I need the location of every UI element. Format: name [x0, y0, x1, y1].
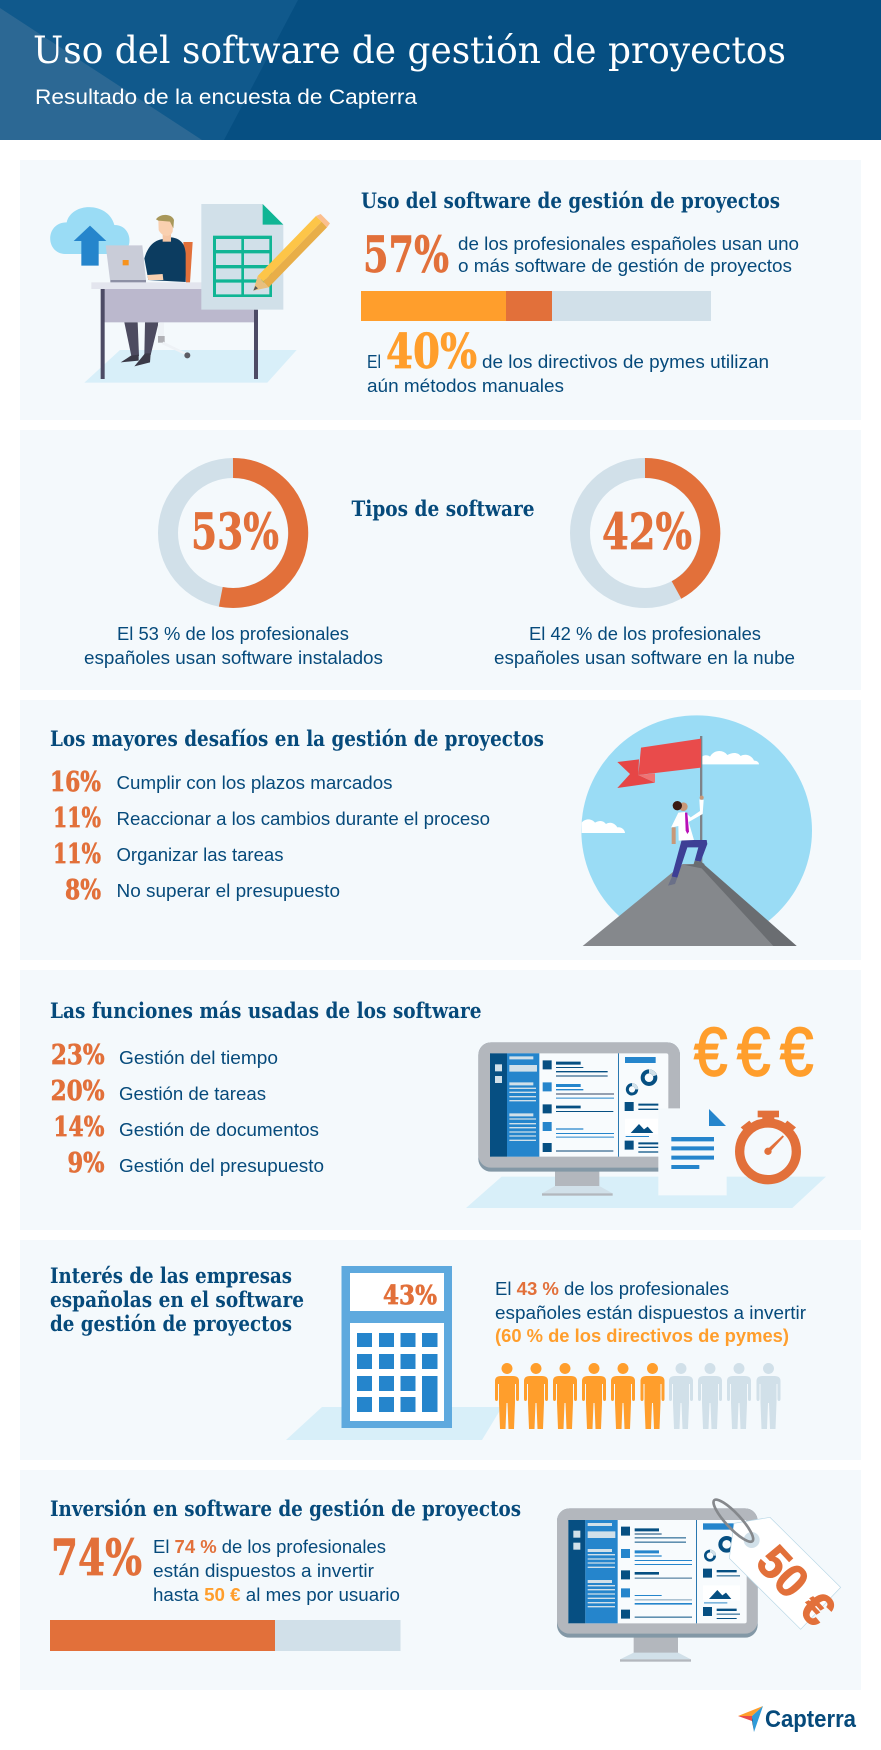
list of features: 23% [51, 1040, 105, 1071]
heading: Uso del software de gestión de proyectos [361, 188, 780, 213]
illustration: monitor, euros, document, stopwatch: € [780, 1015, 813, 1091]
illustration: monitor with 50 € price tag: 50 € [747, 1535, 845, 1635]
text: investment description: hasta 50 € al mes por usuario [153, 1584, 400, 1605]
heading: Los mayores desafíos en la gestión de proyectos [50, 726, 544, 751]
text: interest description: españoles están dispuestos a invertir [495, 1302, 806, 1323]
panel: interest [20, 1240, 861, 1460]
subtitle: Resultado de la encuesta de Capterra [35, 86, 417, 109]
list of features: 14% [53, 1112, 104, 1143]
list of features [51, 1040, 324, 1179]
donut 53% [168, 468, 298, 598]
stat 40%: 40% [386, 324, 477, 380]
text: investment description: El 74 % de los profesionales [153, 1536, 386, 1557]
list of features: Gestión de documentos [119, 1119, 319, 1140]
stacked bar [361, 291, 711, 321]
text: 57% description: de los profesionales españoles usan uno [458, 233, 799, 254]
illustration: climber with flag on mountain [581, 715, 812, 946]
donut 53%: 53% [191, 502, 279, 561]
list of challenges: 11% [53, 839, 101, 870]
stat 74%: 74% [51, 1528, 142, 1587]
caption right [494, 623, 795, 668]
heading: Tipos de software [352, 496, 534, 521]
text: 57% description [458, 233, 799, 276]
list of features: Gestión del presupuesto [119, 1155, 324, 1176]
list of challenges: 8% [65, 875, 101, 906]
text: investment description [153, 1536, 400, 1605]
caption right: españoles usan software en la nube [494, 647, 795, 668]
illustration: calculator 43% [342, 1266, 452, 1428]
heading: Las funciones más usadas de los software [50, 998, 482, 1023]
list of challenges: Cumplir con los plazos marcados [116, 772, 392, 793]
heading [50, 1263, 304, 1336]
caption left: El 53 % de los profesionales [117, 623, 349, 644]
heading: españolas en el software [50, 1287, 304, 1312]
header banner [0, 0, 881, 140]
list of challenges: 16% [50, 767, 101, 798]
list of features: Gestión de tareas [119, 1083, 266, 1104]
heading: de gestión de proyectos [50, 1311, 292, 1336]
stat 40%: de los directivos de pymes utilizan [482, 351, 769, 372]
caption right: El 42 % de los profesionales [529, 623, 761, 644]
list of features: 20% [51, 1076, 105, 1107]
floor [286, 1407, 502, 1440]
panel: investment [20, 1470, 861, 1690]
illustration: monitor, euros, document, stopwatch: € [737, 1015, 770, 1091]
text: interest description [495, 1278, 806, 1346]
list of challenges: 11% [53, 803, 101, 834]
caption left: españoles usan software instalados [84, 647, 383, 668]
illustration: monitor, euros, document, stopwatch [466, 1015, 826, 1208]
donut 42%: 42% [602, 502, 692, 561]
stat 40%: El [367, 351, 381, 372]
wordmark: Capterra [765, 1706, 857, 1733]
pictogram: 6 of 10 people [495, 1363, 780, 1429]
text: interest description: (60 % de los directivos de pymes) [495, 1325, 789, 1346]
illustration: calculator 43%: 43% [383, 1281, 437, 1311]
icon: logo mark [738, 1706, 763, 1732]
list of challenges: No superar el presupuesto [116, 880, 340, 901]
title: Uso del software de gestión de proyectos [33, 29, 786, 72]
panel: software types [20, 430, 861, 690]
progress bar [50, 1620, 400, 1651]
heading: Inversión en software de gestión de proyectos [50, 1496, 521, 1521]
illustration: person at desk with cloud, spreadsheet and pencil [50, 204, 330, 383]
list of features: 9% [68, 1148, 104, 1179]
stat 40% [367, 324, 769, 396]
illustration: monitor, euros, document, stopwatch: € [694, 1015, 727, 1091]
list of challenges: Reaccionar a los cambios durante el proceso [116, 808, 490, 829]
panel: usage [20, 160, 861, 420]
panel: challenges [20, 700, 861, 960]
text: 57% description: o más software de gestión de proyectos [458, 255, 792, 276]
caption left [84, 623, 383, 668]
stat 57%: 57% [363, 225, 449, 284]
list of challenges [50, 767, 490, 906]
text: investment description: están dispuestos a invertir [153, 1560, 374, 1581]
text: interest description: El 43 % de los profesionales [495, 1278, 729, 1299]
illustration: monitor with 50 € price tag [557, 1495, 845, 1662]
logo: Capterra [738, 1706, 857, 1733]
list of challenges: Organizar las tareas [116, 844, 284, 865]
stat 40%: aún métodos manuales [367, 375, 564, 396]
donut 42% [580, 468, 710, 598]
panel: features [20, 970, 861, 1230]
heading: Interés de las empresas [50, 1263, 292, 1288]
list of features: Gestión del tiempo [119, 1047, 278, 1068]
